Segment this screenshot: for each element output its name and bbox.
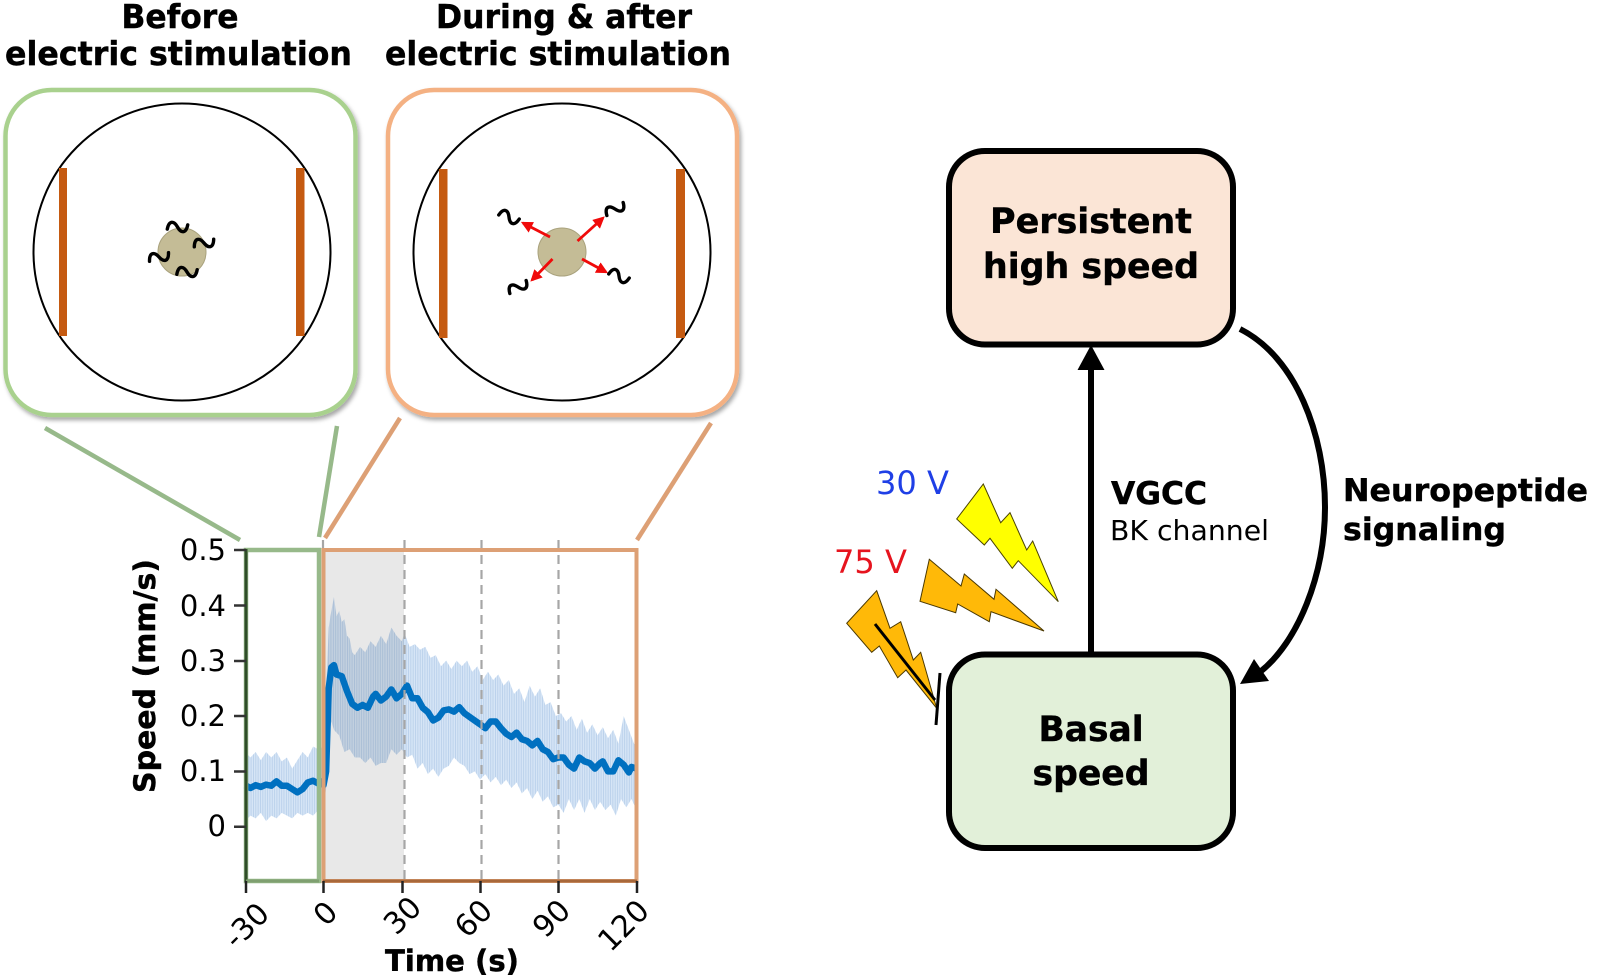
- state box: basal speed: [949, 654, 1233, 848]
- connector lines: green: [45, 426, 337, 540]
- dashed time markers: [323, 540, 558, 881]
- panel: during and after stimulation: [388, 90, 737, 415]
- title: during and after electric stimulation: [385, 0, 731, 73]
- standard deviation band: [245, 597, 637, 821]
- worm cluster: [538, 228, 586, 276]
- arrow: persistent back to basal: [1240, 329, 1325, 684]
- left electrode: [439, 169, 448, 338]
- label: neuropeptide signaling: signaling: [1343, 512, 1506, 548]
- y axis: [234, 549, 246, 882]
- label: VGCC and BK channel: VGCC: [1111, 476, 1207, 512]
- panel: before stimulation: [6, 90, 356, 415]
- y axis title: Speed (mm/s): [128, 559, 162, 793]
- title: before electric stimulation: [5, 0, 352, 73]
- right electrode: [676, 169, 685, 338]
- x tick labels: 120: [591, 893, 657, 959]
- state box: persistent high speed: Persistent: [990, 202, 1192, 242]
- y tick labels: 0.1: [180, 754, 226, 788]
- x tick labels: -30: [217, 896, 277, 956]
- title: during and after electric stimulation: electric stimulation: [385, 34, 731, 73]
- mean speed line: [245, 665, 637, 792]
- arrow: basal to persistent: [1078, 345, 1104, 653]
- state box: persistent high speed: high speed: [983, 247, 1199, 287]
- x tick labels: [217, 890, 657, 959]
- dish circle: [414, 104, 710, 400]
- y tick labels: 0.2: [180, 699, 226, 733]
- dispersed worms: [498, 201, 630, 295]
- state box: basal speed: Basal: [1038, 710, 1144, 750]
- line chart: speed over time: [128, 533, 657, 978]
- label: 75 V: 75 V: [834, 545, 907, 581]
- x axis: [246, 881, 637, 893]
- label: neuropeptide signaling: [1343, 473, 1588, 548]
- green before window: [246, 550, 319, 881]
- x tick labels: 60: [448, 893, 500, 945]
- left electrode: [59, 168, 67, 336]
- worms at centre: [149, 222, 214, 277]
- stimulation period shading: [325, 552, 404, 881]
- state box: basal speed: speed: [1032, 754, 1150, 794]
- label: VGCC and BK channel: [1110, 476, 1269, 547]
- dish circle: [34, 104, 330, 400]
- state box: persistent high speed: [949, 151, 1233, 344]
- y tick labels: [180, 533, 226, 843]
- connector lines: orange: [325, 418, 711, 540]
- icon: yellow lightning bolt: [957, 484, 1058, 602]
- label: 30 V: 30 V: [876, 466, 949, 502]
- title: before electric stimulation: electric stimulation: [5, 34, 352, 73]
- icon: orange lightning bolt blocked: [847, 591, 940, 725]
- y tick labels: 0: [208, 809, 226, 843]
- red dispersal arrows: [523, 218, 606, 280]
- worm cluster: [158, 228, 206, 276]
- orange after window: [324, 550, 636, 881]
- y tick labels: 0.5: [180, 533, 226, 567]
- x tick labels: 30: [377, 890, 429, 942]
- icon: orange lightning bolt: [920, 559, 1044, 631]
- right electrode: [296, 168, 304, 336]
- label: neuropeptide signaling: Neuropeptide: [1343, 473, 1588, 509]
- y tick labels: 0.3: [180, 644, 226, 678]
- y tick labels: 0.4: [180, 589, 226, 623]
- x tick labels: 90: [526, 893, 578, 945]
- label: VGCC and BK channel: BK channel: [1110, 514, 1269, 547]
- x axis title: Time (s): [385, 944, 519, 978]
- x tick labels: 0: [307, 895, 345, 933]
